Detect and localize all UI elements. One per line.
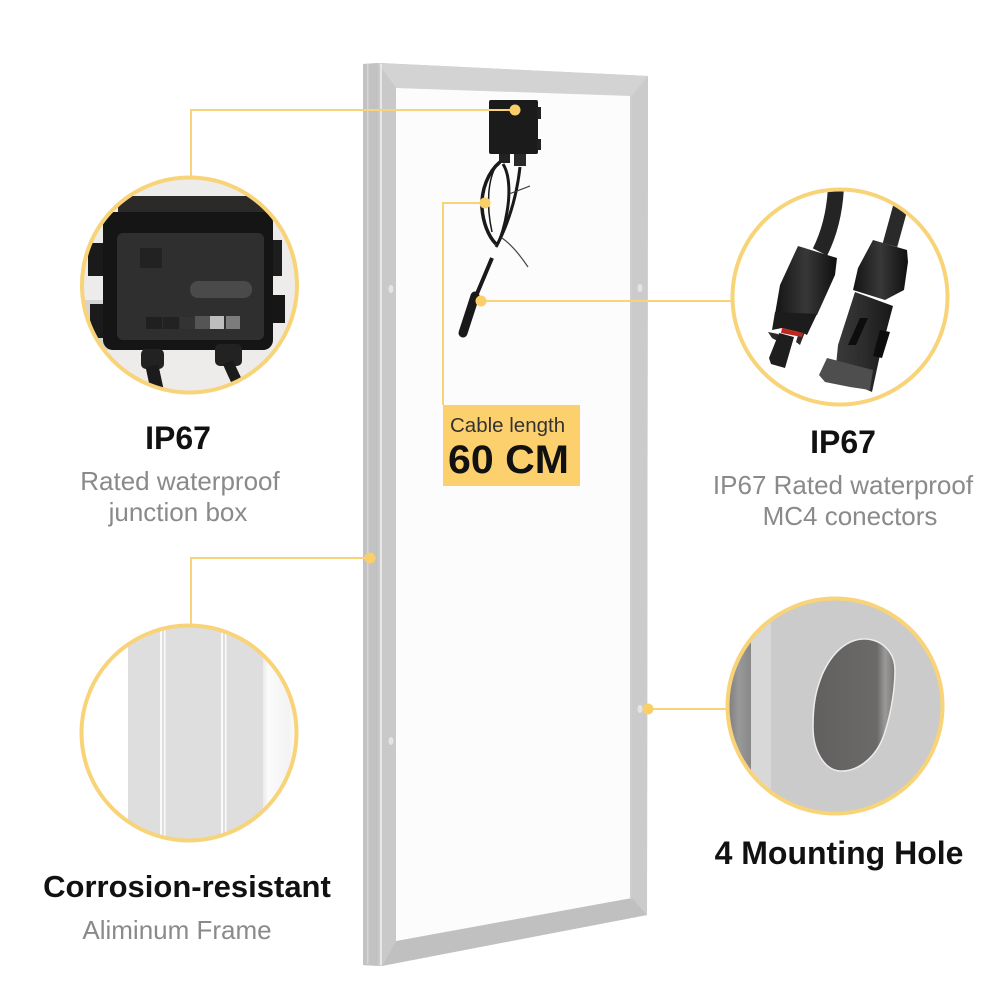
junction box on panel xyxy=(489,100,541,166)
label: IP67 MC4 connectors: IP67 xyxy=(810,424,876,460)
label: IP67 MC4 connectors xyxy=(713,424,974,531)
circle: MC4 connectors photo xyxy=(731,186,951,408)
leader line: cable xyxy=(443,198,490,405)
label: IP67 junction box xyxy=(80,420,280,527)
mounting holes xyxy=(388,284,642,745)
label: IP67 junction box: junction box xyxy=(108,497,247,527)
leader line: junction box xyxy=(191,104,520,176)
leader line: MC4 connector xyxy=(476,296,731,306)
label: IP67 MC4 connectors: MC4 conectors xyxy=(763,501,937,531)
label: IP67 MC4 connectors: IP67 Rated waterproof xyxy=(713,470,974,500)
circle: mounting hole photo xyxy=(726,597,946,817)
panel frame xyxy=(363,63,648,966)
solar panel xyxy=(363,63,648,966)
label: 4 mounting hole: 4 Mounting Hole xyxy=(715,835,963,871)
label: IP67 junction box: IP67 xyxy=(145,420,211,456)
leader line: mounting hole xyxy=(642,704,726,714)
cable loop and connector xyxy=(463,162,530,333)
panel back sheet xyxy=(396,88,632,941)
label: corrosion-resistant xyxy=(43,869,331,945)
label: corrosion-resistant: Corrosion-resistant xyxy=(43,869,331,904)
callout box: cable length: 60 CM xyxy=(448,438,569,482)
callout box: cable length: Cable length xyxy=(450,414,565,437)
left connector xyxy=(768,246,837,368)
circle: aluminum frame photo xyxy=(79,624,299,844)
leader line: frame xyxy=(191,552,376,624)
right connector xyxy=(819,240,908,392)
label: corrosion-resistant: Aliminum Frame xyxy=(82,915,272,945)
label: IP67 junction box: Rated waterproof xyxy=(80,466,280,496)
callout box: cable length xyxy=(443,405,580,486)
circle: junction box photo xyxy=(80,176,300,394)
